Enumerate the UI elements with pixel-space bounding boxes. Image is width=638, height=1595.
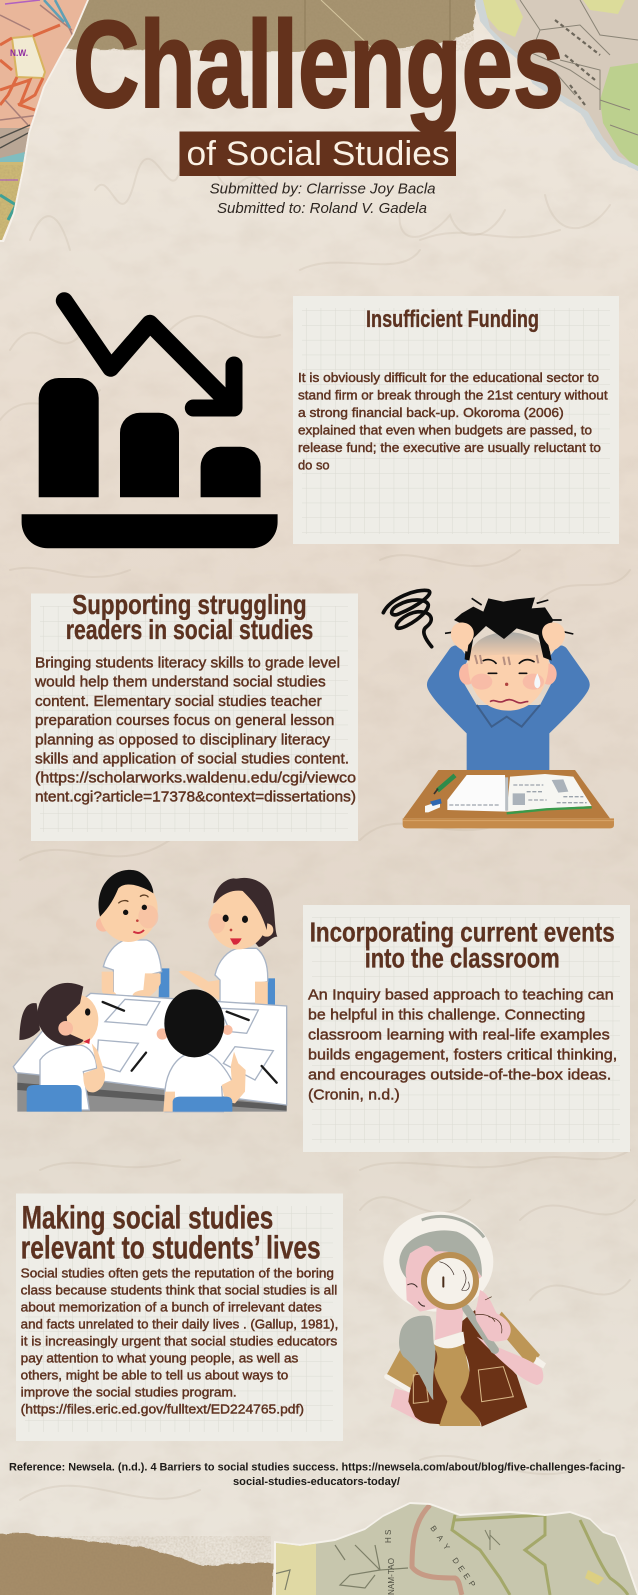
body text: insufficient funding: It is obviously difficult for the educational sector to — [298, 371, 599, 385]
panel: making social studies relevant — [16, 1194, 343, 1441]
body text: incorporating current events: classroom learning with real-life examples — [308, 1026, 610, 1043]
body text: insufficient funding: stand firm or break through the 21st century without — [298, 388, 608, 402]
body text: supporting struggling readers: Bringing students literacy skills to grade level — [35, 655, 340, 671]
icon: declining bar chart — [22, 301, 278, 548]
heading: supporting struggling readers: readers in social studies — [66, 614, 313, 645]
body text: supporting struggling readers: ntent.cgi?article=17378&context=dissertations) — [35, 790, 356, 806]
body text: incorporating current events — [308, 986, 617, 1103]
body text: making social studies relevant: and facts unrelated to their daily lives . (Gallup, 1981), — [21, 1316, 338, 1331]
torn brown paper bottom left — [0, 1533, 273, 1595]
figure: boy lower center seen from back — [157, 989, 246, 1112]
submission credits: Submitted by: Clarrisse Joy Bacla — [210, 182, 436, 198]
body text: insufficient funding: release fund; the executive are usually reluctant to — [298, 441, 601, 455]
body text: supporting struggling readers: (https://scholarworks.waldenu.edu/cgi/viewco — [35, 771, 356, 787]
map labels — [384, 1524, 479, 1595]
reference note: Reference: Newsela. (n.d.). 4 Barriers to social studies success. https://newsela.com/about/blog/five-challenges-facing- — [9, 1462, 625, 1474]
body text: supporting struggling readers: preparation courses focus on general lesson — [35, 713, 334, 729]
heading: insufficient funding: Insufficient Funding — [366, 306, 539, 333]
body text: making social studies relevant: improve the social studies program. — [21, 1384, 237, 1399]
map labels: DEEP — [450, 1556, 479, 1592]
body text: insufficient funding — [298, 371, 608, 472]
reference note — [9, 1462, 625, 1488]
body text: incorporating current events: An Inquiry based approach to teaching can — [308, 986, 614, 1003]
body text: making social studies relevant: class because students think that social studies is all — [21, 1282, 337, 1297]
body text: making social studies relevant — [21, 1265, 338, 1416]
torn map top left — [0, 0, 89, 242]
body text: making social studies relevant: (https://files.eric.ed.gov/fulltext/ED224765.pdf) — [21, 1401, 304, 1416]
figure: girl lower left — [19, 983, 105, 1112]
subtitle banner: of Social Studies — [186, 135, 450, 173]
heading: supporting struggling readers — [66, 589, 313, 645]
panel: insufficient funding — [293, 296, 619, 544]
body text: insufficient funding: do so — [298, 458, 330, 472]
submission credits: Submitted to: Roland V. Gadela — [217, 201, 427, 217]
reference note: social-studies-educators-today/ — [233, 1476, 401, 1488]
heading: making social studies relevant: Making social studies — [22, 1200, 273, 1236]
torn map top right — [470, 0, 638, 176]
map labels: NAM-TAO — [387, 1558, 396, 1595]
map labels: H S — [384, 1530, 393, 1543]
body text: supporting struggling readers: skills and application of social studies content. — [35, 751, 349, 767]
illustration: stressed student at desk — [383, 590, 614, 828]
body text: incorporating current events: (Cronin, n.d.) — [308, 1086, 400, 1103]
torn map bottom right — [270, 1500, 638, 1595]
submission credits — [210, 182, 436, 217]
body text: incorporating current events: be helpful in this challenge. Connecting — [308, 1006, 585, 1023]
body text: making social studies relevant: pay attention to what young people, as well as — [21, 1350, 299, 1365]
heading: supporting struggling readers: Supporting struggling — [72, 589, 307, 620]
body text: making social studies relevant: about memorization of a bunch of irrelevant dates — [21, 1299, 322, 1314]
heading: making social studies relevant: relevant to students’ lives — [21, 1230, 321, 1266]
body text: supporting struggling readers: planning as opposed to disciplinary literacy — [35, 732, 331, 748]
heading: incorporating current events: into the classroom — [365, 943, 560, 974]
body text: making social studies relevant: it is increasingly urgent that social studies educators — [21, 1333, 338, 1348]
body text: insufficient funding: a strong financial back-up. Okoroma (2006) — [298, 406, 564, 420]
panel: supporting struggling readers — [31, 589, 358, 841]
map labels: BAY — [428, 1524, 455, 1557]
illustration: detective with magnifying glass — [383, 1212, 546, 1427]
body text: making social studies relevant: Social studies often gets the reputation of the boring — [21, 1265, 334, 1280]
body text: supporting struggling readers: content. Elementary social studies teacher — [35, 694, 322, 710]
body text: insufficient funding: explained that even when budgets are passed, to — [298, 424, 592, 438]
illustration: students discussing around table — [13, 870, 287, 1112]
icon: stress scribble — [383, 590, 432, 647]
body text: incorporating current events: and encourages outside-of-the-box ideas. — [308, 1066, 611, 1083]
map label N.W.: N.W. — [10, 48, 28, 58]
body text: making social studies relevant: others, might be able to tell us about ways to — [21, 1367, 288, 1382]
body text: incorporating current events: builds engagement, fosters critical thinking, — [308, 1046, 617, 1063]
heading: incorporating current events — [310, 917, 615, 974]
heading: making social studies relevant — [21, 1200, 321, 1266]
figure: girl top right — [178, 878, 277, 1005]
table — [13, 993, 287, 1112]
figure: boy top center — [96, 870, 162, 1000]
torn brown paper top — [65, 0, 476, 52]
panel: incorporating current events — [303, 905, 630, 1152]
body text: supporting struggling readers: would help them understand social studies — [34, 675, 326, 691]
body text: supporting struggling readers — [34, 655, 356, 806]
